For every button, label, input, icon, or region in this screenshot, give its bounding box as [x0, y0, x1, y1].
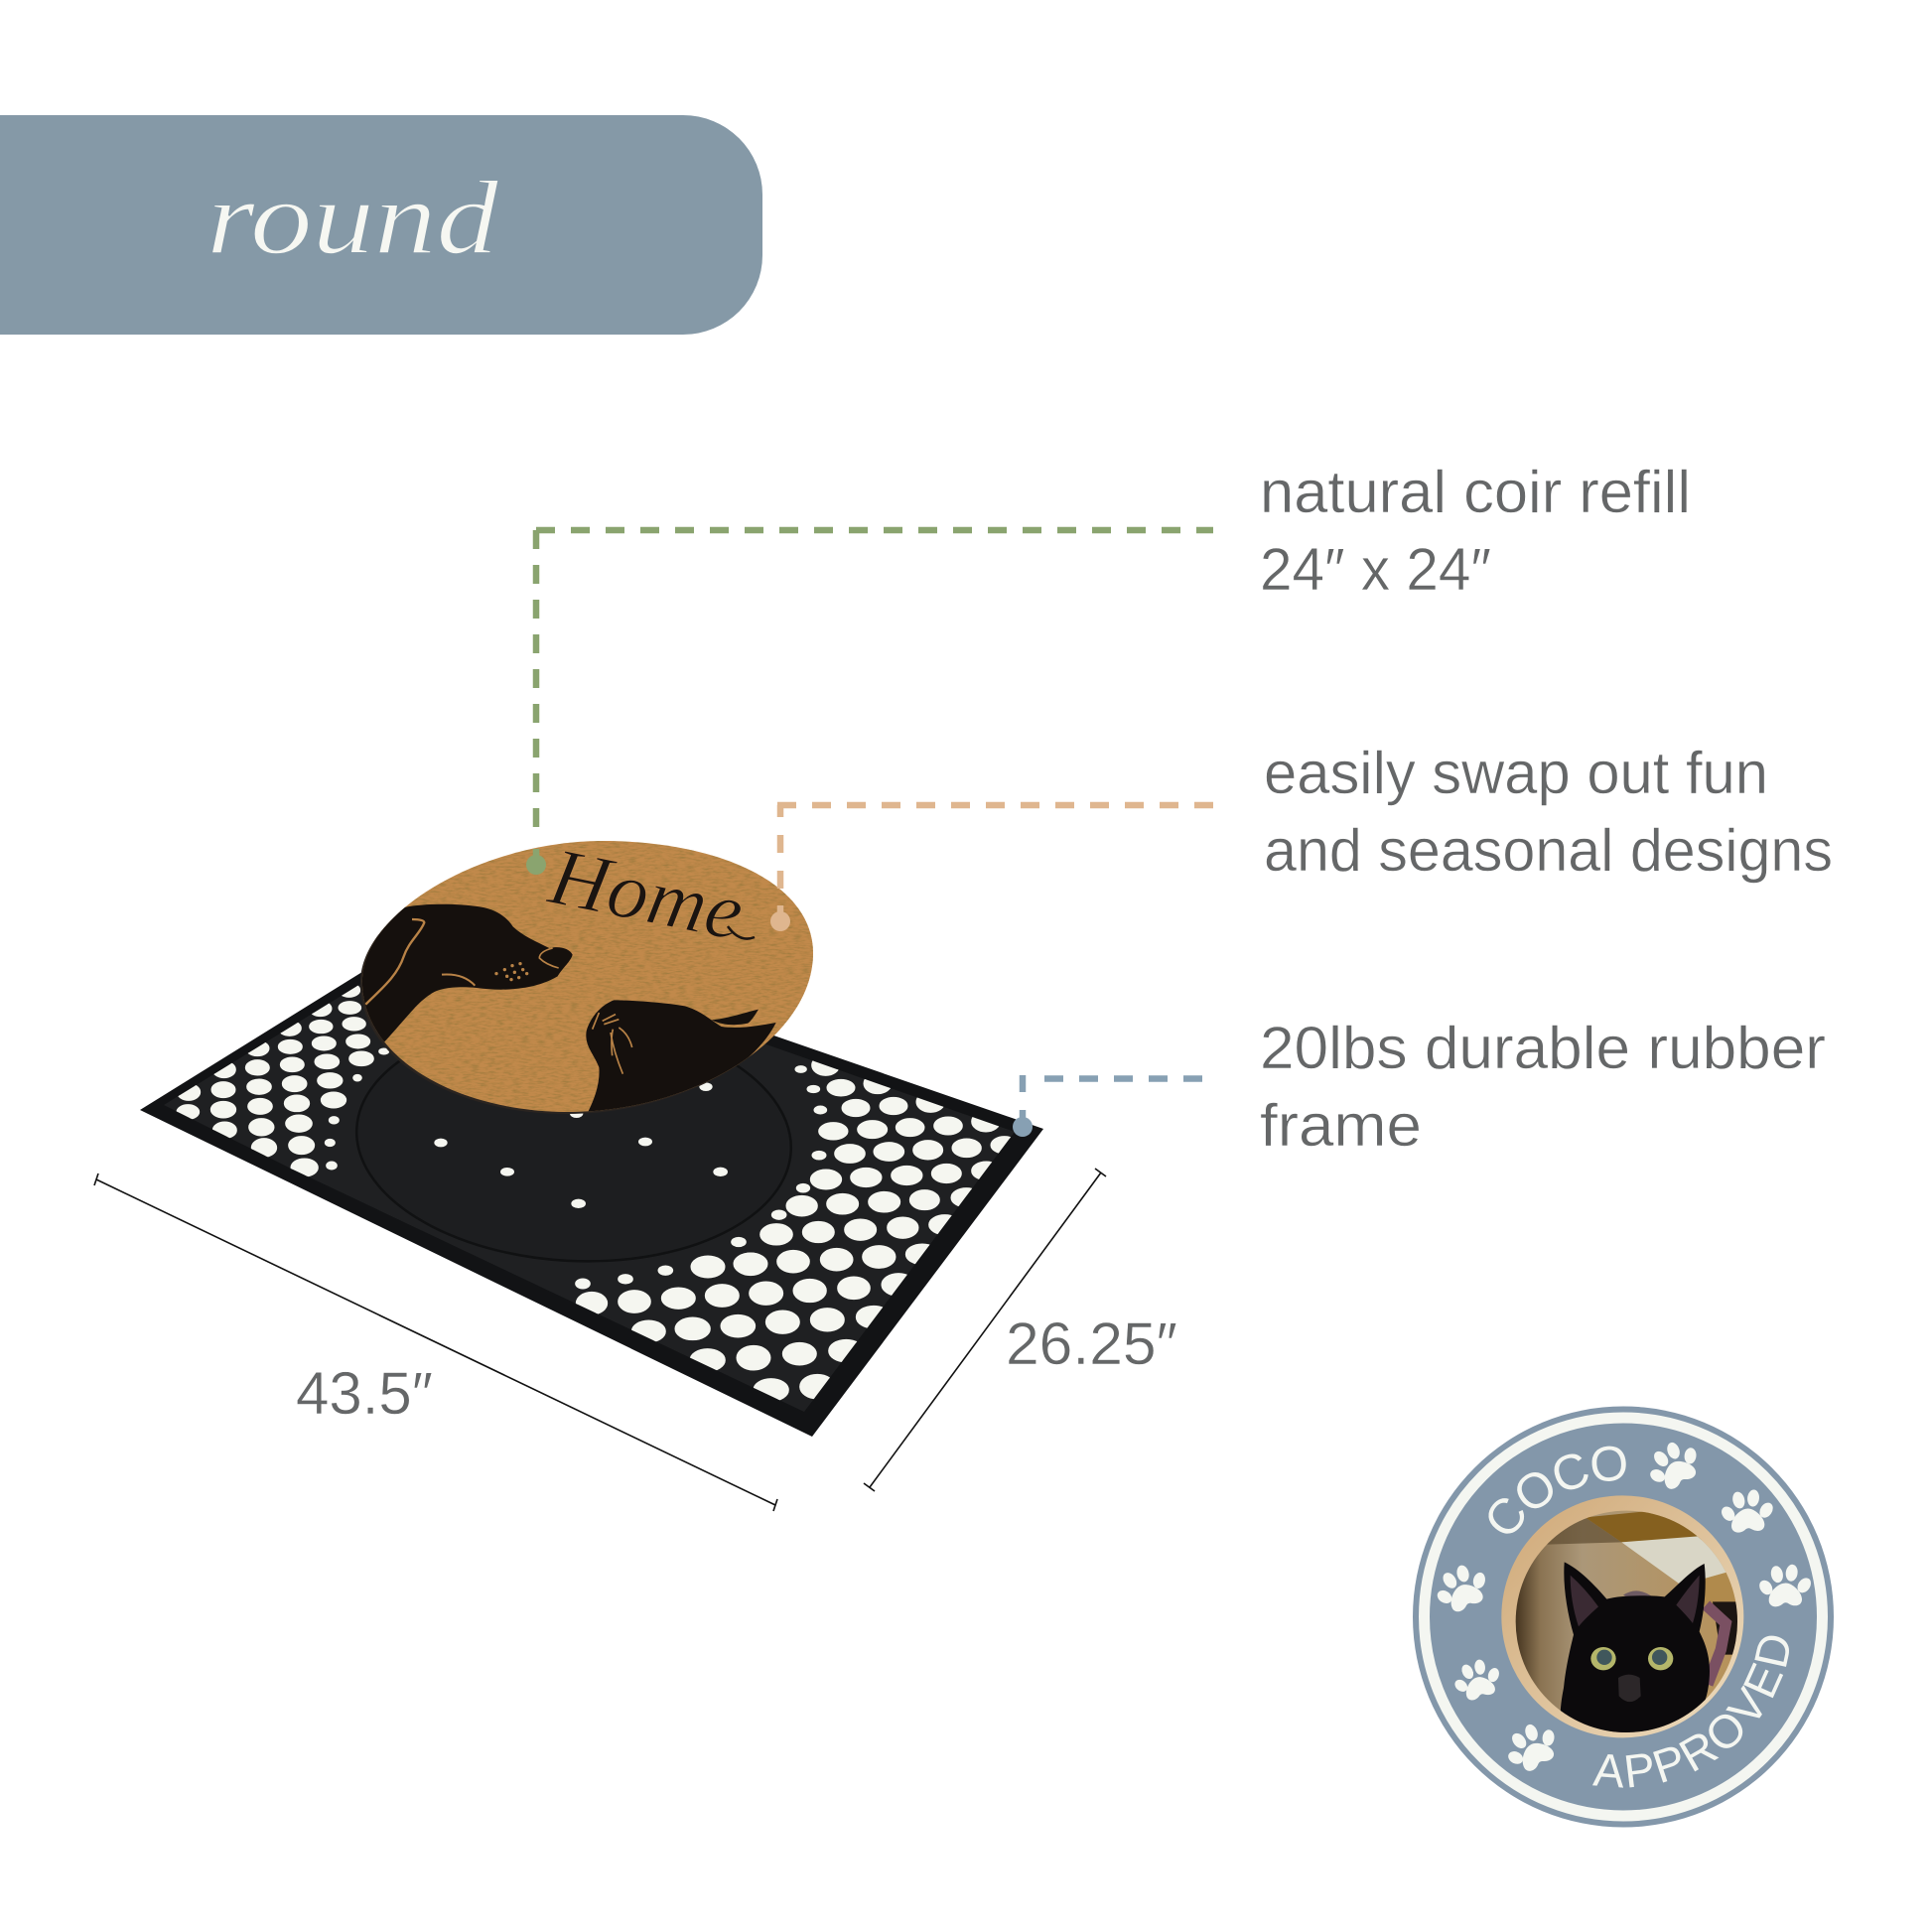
- dog silhouette: [350, 904, 573, 1042]
- nose: [1618, 1675, 1641, 1702]
- text: natural coir refill: 24″ x 24″: [1260, 536, 1491, 603]
- dimension line: width: [94, 1173, 777, 1511]
- paw prints: [1427, 1433, 1814, 1779]
- left dot field: [177, 984, 1018, 1401]
- harness: [1713, 1601, 1737, 1655]
- Home lettering: Home: [541, 830, 751, 958]
- callout: natural coir leader: [526, 530, 1213, 875]
- dimension label: 43.5: 43.5″: [296, 1360, 433, 1427]
- text: rubber frame: 20lbs durable rubber: [1260, 1015, 1826, 1081]
- text: rubber frame: frame: [1260, 1092, 1422, 1159]
- rubber frame mat: [140, 921, 1043, 1437]
- callout: seasonal designs leader: [770, 805, 1213, 931]
- badge text: COCO: COCO: [1489, 1446, 1626, 1534]
- title banner: [0, 115, 762, 335]
- text: natural coir refill: natural coir refill: [1260, 459, 1691, 525]
- title: round: round: [207, 160, 499, 276]
- bottom dot field: [576, 1238, 864, 1401]
- right dot field: [735, 1055, 1018, 1333]
- dimension line: depth: [864, 1169, 1106, 1491]
- circular recess: [350, 1008, 797, 1272]
- cat photo porthole: [1501, 1495, 1744, 1740]
- badge text: APPROVED: APPROVED: [1592, 1636, 1789, 1788]
- cat silhouette: [583, 1000, 776, 1122]
- recess pin holes: [434, 1082, 728, 1208]
- coir disc with dog and cat: [350, 830, 813, 1122]
- callout: rubber frame leader: [1013, 1075, 1207, 1137]
- text: easily swap: and seasonal designs: [1264, 817, 1833, 884]
- cat: [1561, 1562, 1710, 1740]
- badge: Coco approved: [1413, 1406, 1834, 1827]
- eyes: [1590, 1647, 1616, 1670]
- dimension label: 26.25: 26.25″: [1006, 1311, 1177, 1377]
- text: easily swap: easily swap out fun: [1264, 740, 1768, 806]
